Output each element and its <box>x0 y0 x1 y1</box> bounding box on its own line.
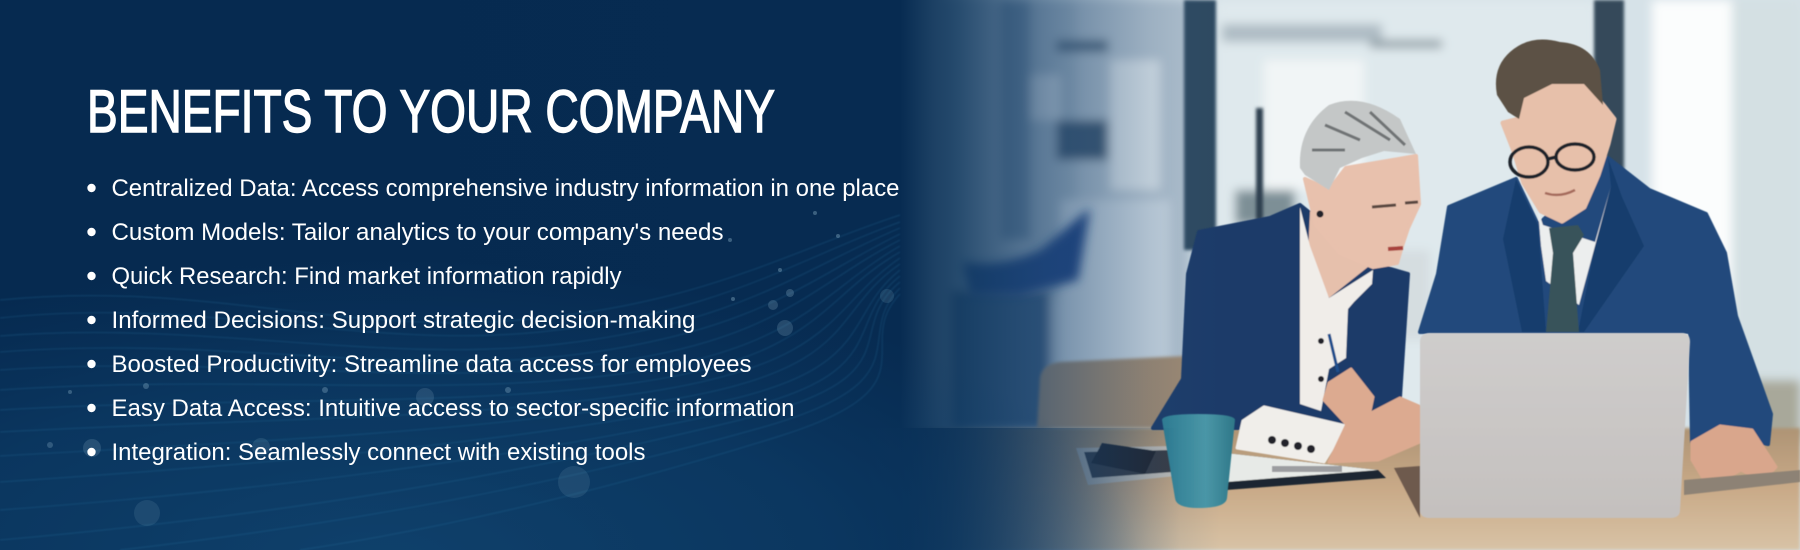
woman hands <box>1324 369 1421 462</box>
item: centralized data: Centralized Data: Access comprehensive industry information in one place <box>112 175 900 202</box>
woman cuff <box>1237 407 1346 462</box>
shirt buttons <box>1318 338 1324 382</box>
item: integration: Integration: Seamlessly connect with existing tools <box>112 439 646 466</box>
coffee mug <box>1162 414 1235 508</box>
title: BENEFITS TO YOUR COMPANY <box>87 78 775 145</box>
man hand <box>1692 426 1776 488</box>
benefits list <box>87 175 900 466</box>
man lapels <box>1503 158 1644 332</box>
woman face <box>1305 156 1419 267</box>
woman eye and lips <box>1372 202 1418 207</box>
man hair <box>1496 40 1603 119</box>
man tie <box>1546 225 1584 332</box>
earring <box>1316 210 1324 218</box>
pen <box>1329 334 1338 372</box>
clipboard <box>1226 453 1386 490</box>
man jacket <box>1420 158 1771 444</box>
item: quick research: Quick Research: Find market information rapidly <box>112 263 622 290</box>
woman shirt <box>1300 207 1373 411</box>
wooden chair <box>1037 356 1186 428</box>
table <box>860 428 1800 550</box>
hair streaks <box>1312 112 1405 150</box>
dark window pillars <box>1184 0 1624 250</box>
laptop <box>1394 333 1690 518</box>
item: informed decisions: Informed Decisions: Support strategic decision-making <box>112 307 696 334</box>
item: boosted productivity: Boosted Productivity: Streamline data access for employees <box>112 351 752 378</box>
man mouth <box>1545 190 1575 195</box>
paper under the man's hand <box>1684 470 1800 495</box>
tablet and phone <box>1076 443 1176 485</box>
left fade over the photo <box>0 0 1250 550</box>
man glasses <box>1510 144 1594 177</box>
woman neck <box>1308 211 1373 298</box>
woman hair <box>1300 101 1416 190</box>
blue chair <box>962 208 1090 296</box>
light streaks and bokeh <box>0 211 1140 550</box>
man neck and face <box>1503 84 1614 221</box>
cuff buttons <box>1268 436 1315 453</box>
woman <box>1153 101 1421 462</box>
woman jacket <box>1153 205 1408 428</box>
man shirt <box>1538 186 1611 305</box>
item: easy data access: Easy Data Access: Intuitive access to sector-specific information <box>112 395 794 422</box>
item: custom models: Custom Models: Tailor analytics to your company's needs <box>112 219 724 246</box>
man <box>1420 40 1776 488</box>
